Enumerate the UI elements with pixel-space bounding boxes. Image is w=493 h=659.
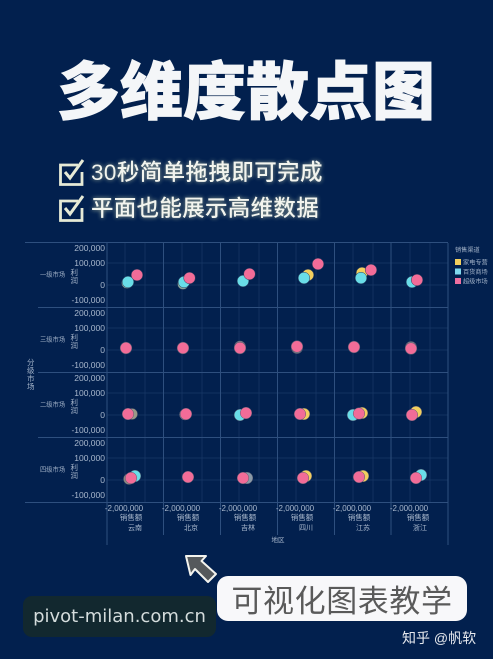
y axis ticks: 0 <box>100 475 105 485</box>
sub grid lines <box>107 243 448 502</box>
y axis ticks: 0 <box>100 345 105 355</box>
y axis ticks: 100,000 <box>74 453 105 463</box>
feature list <box>59 158 324 222</box>
y axis ticks: 100,000 <box>74 258 105 268</box>
x axis labels: 销售额 <box>348 512 371 522</box>
row 3 points <box>122 406 422 421</box>
row labels: 场 <box>27 382 35 391</box>
legend: 超级市场 <box>463 278 488 286</box>
x axis labels: 云南 <box>128 523 142 532</box>
row labels <box>27 267 78 480</box>
row labels: 市 <box>27 373 35 383</box>
x axis labels: 销售额 <box>120 512 143 522</box>
x axis labels: 吉林 <box>241 523 255 532</box>
row labels: 润 <box>70 275 78 285</box>
y axis ticks: -100,000 <box>71 295 105 305</box>
legend: 销售渠道 <box>455 246 480 254</box>
y axis ticks: 100,000 <box>74 323 105 333</box>
row labels: 润 <box>70 405 78 415</box>
website badge: pivot-milan.com.cn <box>33 606 206 627</box>
x axis labels: 销售额 <box>407 512 430 522</box>
row labels: 二级市场 <box>40 400 65 408</box>
x axis labels: 江苏 <box>356 523 370 532</box>
row labels: 级 <box>27 365 35 375</box>
x axis labels: 四川 <box>299 524 313 532</box>
legend <box>455 246 488 286</box>
x axis labels: 销售额 <box>291 512 314 522</box>
legend: 百货商场 <box>463 268 488 276</box>
row labels: 利 <box>70 267 78 277</box>
y axis ticks: -100,000 <box>71 490 105 500</box>
watermark: 知乎 @帆软 <box>402 630 476 646</box>
y axis ticks: -100,000 <box>71 425 105 435</box>
y axis ticks: 200,000 <box>74 308 105 318</box>
x axis labels: -2,000,000 <box>105 504 144 513</box>
title: 多维度散点图 <box>57 58 435 128</box>
x axis labels: -2,000,000 <box>162 504 201 513</box>
y axis ticks: 100,000 <box>74 388 105 398</box>
x axis labels: 销售额 <box>177 512 200 522</box>
x axis labels: 销售额 <box>234 512 257 522</box>
feature text 1: 30秒简单拖拽即可完成 <box>91 160 323 185</box>
row labels: 一级市场 <box>40 270 65 278</box>
row labels: 分 <box>27 358 35 367</box>
x axis labels: -2,000,000 <box>276 504 315 513</box>
x axis labels: 浙江 <box>413 523 427 532</box>
row labels: 四级市场 <box>40 464 65 474</box>
x axis labels: -2,000,000 <box>333 504 372 513</box>
x axis labels: 地区 <box>272 535 285 544</box>
legend: 家电专营 <box>463 258 488 266</box>
x axis labels: 北京 <box>184 523 198 532</box>
x axis labels: -2,000,000 <box>390 504 429 513</box>
y axis ticks: -100,000 <box>71 360 105 370</box>
row labels: 利 <box>70 397 78 407</box>
x axis labels: -2,000,000 <box>219 504 258 513</box>
y axis ticks <box>71 243 105 500</box>
icon: checkbox 1 <box>59 159 84 186</box>
row labels: 润 <box>70 470 78 480</box>
icon: checkbox 2 <box>59 195 84 222</box>
tutorial label: 可视化图表教学 <box>231 576 453 621</box>
feature text 2: 平面也能展示高维数据 <box>91 196 319 221</box>
row labels: 利 <box>70 332 78 342</box>
y axis ticks: 0 <box>100 280 105 290</box>
y axis ticks: 200,000 <box>74 373 105 383</box>
y axis ticks: 200,000 <box>74 243 105 253</box>
row 4 points <box>124 469 427 484</box>
row labels: 利 <box>70 462 78 472</box>
row labels: 润 <box>70 340 78 350</box>
icon: cursor arrow <box>186 556 216 582</box>
main grid lines <box>25 242 448 545</box>
y axis ticks: 200,000 <box>74 438 105 448</box>
row 1 points <box>122 258 423 290</box>
website badge <box>23 596 216 637</box>
y axis ticks: 0 <box>100 410 105 420</box>
row labels: 三级市场 <box>40 334 65 344</box>
x axis labels <box>105 504 430 544</box>
row 2 points <box>120 341 417 354</box>
